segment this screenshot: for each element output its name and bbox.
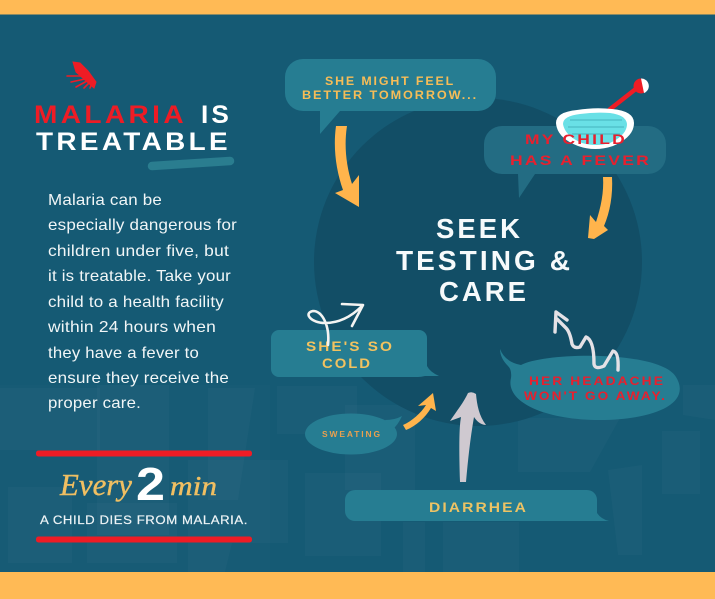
heading: malaria is treatable: MALARIA: [34, 101, 187, 129]
body text: Malaria can be: [48, 192, 162, 209]
bubble: diarrhea: DIARRHEA: [429, 500, 528, 515]
icon: mosquito: [67, 62, 96, 88]
center text: seek testing and care: CARE: [439, 276, 529, 307]
heading: malaria is treatable: TREATABLE: [36, 128, 231, 156]
bubble: sweating: [305, 414, 402, 454]
bubble: sweating: SWEATING: [322, 430, 382, 439]
arrow: orange down-right from bubble: [335, 126, 359, 207]
background block pattern: [0, 385, 715, 575]
bubble: her headache: [500, 349, 680, 420]
bottom orange band: [0, 572, 715, 599]
caption: A CHILD DIES FROM MALARIA.: [40, 515, 248, 527]
central dark circle: [314, 98, 642, 426]
heading underline stroke: [152, 161, 230, 166]
body text: child to a health facility: [48, 294, 224, 311]
bubble: diarrhea: [345, 490, 609, 521]
arrow: gray up: [450, 392, 486, 482]
red rule top: [36, 450, 252, 456]
body text: they have a fever to: [48, 345, 199, 362]
body text: within 24 hours when: [47, 319, 216, 336]
body text: proper care.: [48, 395, 141, 412]
bubble: she might feel better tomorrow: SHE MIGHT FEEL: [325, 74, 455, 88]
top orange band: [0, 0, 715, 14]
body text: [47, 192, 237, 412]
heading: malaria is treatable: IS: [201, 101, 232, 129]
bubble: she's so cold: SHE'S SO: [306, 339, 394, 354]
body text: especially dangerous for: [48, 217, 237, 234]
body text: children under five, but: [48, 243, 229, 260]
arrow: orange down from fever bubble: [588, 177, 612, 239]
red rule bottom: [36, 536, 252, 542]
arrow: white loop: [309, 304, 363, 345]
label: my child has a fever: MY CHILD: [525, 131, 627, 147]
arrow: white squiggle up-left: [555, 312, 618, 370]
label: my child has a fever: [510, 131, 651, 168]
bubble: she might feel better tomorrow: [285, 59, 496, 134]
bubble: she might feel better tomorrow: BETTER TOMORROW...: [302, 88, 478, 102]
every 2 min: Every: [59, 467, 132, 502]
label: my child has a fever: HAS A FEVER: [510, 152, 651, 168]
statistic callout: [36, 450, 252, 542]
arrow: orange up-right: [403, 393, 436, 430]
center text: seek testing and care: SEEK: [436, 213, 523, 244]
center text: seek testing and care: [396, 213, 573, 307]
every 2 min: min: [170, 471, 217, 501]
bubble: her headache: WON'T GO AWAY.: [524, 389, 667, 403]
body text: it is treatable. Take your: [48, 268, 231, 285]
every 2 min: 2: [136, 458, 165, 510]
body text: ensure they receive the: [48, 370, 229, 387]
bubble: she's so cold: [271, 330, 439, 377]
center text: seek testing and care: TESTING &: [396, 245, 573, 276]
icon: thermometer and face mask: [556, 78, 649, 149]
bubble: my child has a fever: [484, 126, 666, 198]
bubble: her headache: HER HEADACHE: [529, 374, 665, 388]
every 2 min: [59, 458, 217, 510]
bubble: she's so cold: COLD: [322, 356, 372, 371]
heading: malaria is treatable: [34, 62, 232, 166]
